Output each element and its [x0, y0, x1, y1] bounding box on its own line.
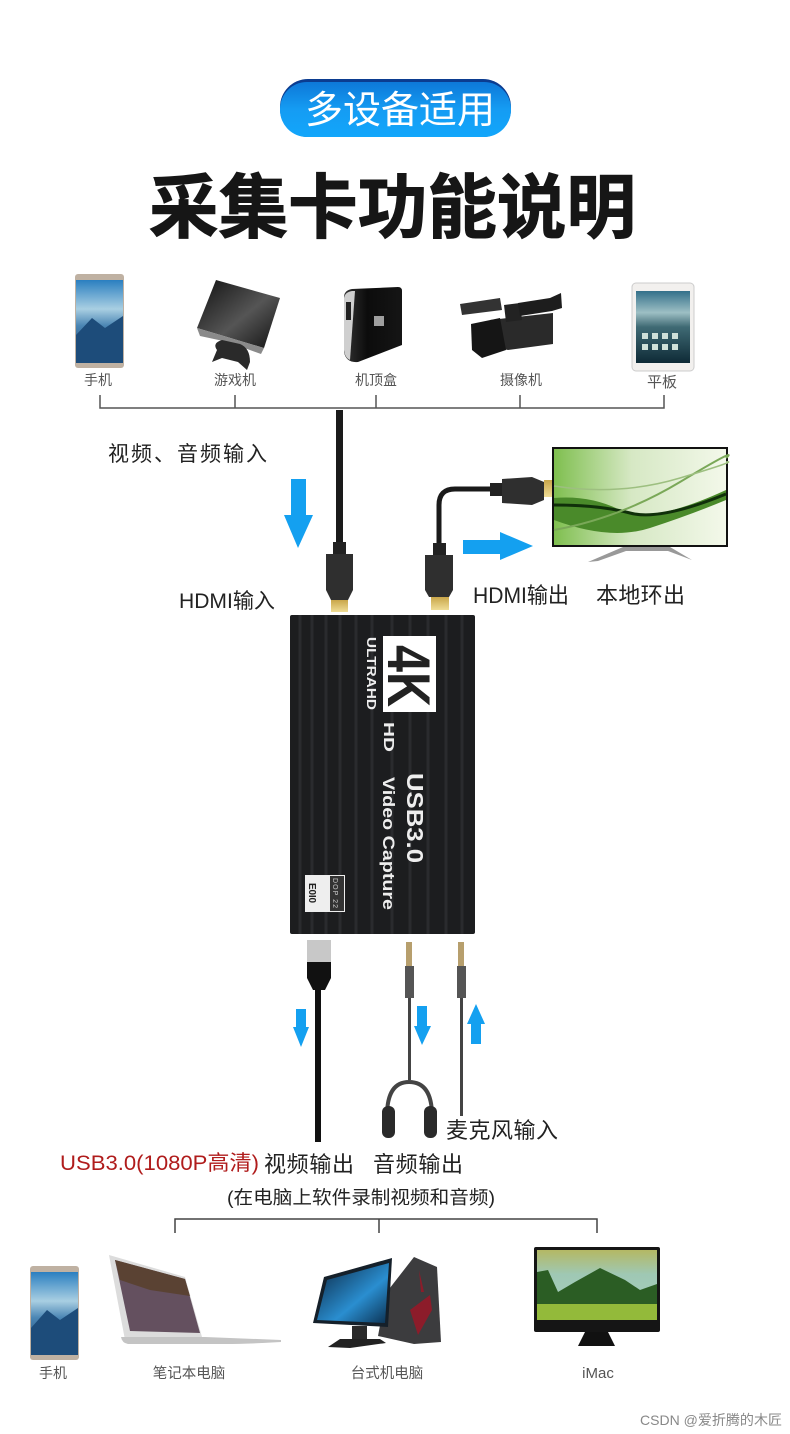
icon: phone: [75, 274, 124, 368]
label: 摄像机: 摄像机: [500, 372, 542, 388]
label: HDMI输入: HDMI输入: [179, 590, 275, 613]
title: 采集卡功能说明: [149, 169, 636, 247]
label: 游戏机: 游戏机: [214, 372, 256, 388]
label: 手机: 手机: [84, 372, 112, 388]
output devices row: [30, 1247, 660, 1382]
arrow: usb down: [293, 1009, 309, 1047]
text: USB3.0: USB3.0: [402, 773, 428, 863]
label: 音频输出: 音频输出: [373, 1152, 463, 1177]
label: 视频、音频输入: 视频、音频输入: [108, 443, 267, 466]
USB cable: [307, 940, 331, 1142]
label: USB3.0: USB3.0(1080P高清): [60, 1152, 259, 1175]
label: HDMI输出: HDMI输出: [473, 583, 569, 608]
label: 笔记本电脑: 笔记本电脑: [153, 1365, 225, 1382]
sticker: [305, 875, 345, 912]
badge: 多设备适用: 多设备适用: [305, 90, 495, 132]
input devices row: [75, 274, 694, 391]
label: iMac: iMac: [582, 1365, 614, 1382]
label: 平板: 平板: [647, 373, 677, 391]
top bracket connector: [100, 395, 664, 408]
arrow: input down: [284, 479, 313, 548]
icon: laptop: [109, 1255, 281, 1344]
label: 视频输出: 视频输出: [264, 1152, 354, 1177]
icon: tablet: [632, 283, 694, 371]
monitor: [552, 447, 729, 562]
watermark: CSDN @爱折腾的木匠: [640, 1412, 782, 1428]
icon: iMac: [534, 1247, 660, 1346]
icon: phone: [30, 1266, 79, 1360]
label: 麦克风输入: 麦克风输入: [446, 1118, 558, 1143]
badge: 多设备适用: [280, 79, 511, 137]
HDMI output cable: [425, 477, 552, 610]
arrow: mic up: [467, 1004, 485, 1044]
4K logo: 4K: [375, 645, 442, 707]
sticker: DOP 22: [331, 878, 338, 908]
audio jack output: [405, 942, 414, 1080]
label: 机顶盒: 机顶盒: [355, 372, 397, 388]
mic jack: [457, 942, 466, 1116]
label: 手机: 手机: [39, 1365, 67, 1381]
label: 台式机电脑: 台式机电脑: [351, 1365, 423, 1382]
icon: game console: [197, 280, 280, 370]
text: HD: HD: [380, 722, 397, 752]
icon: headphones: [382, 1082, 437, 1138]
icon: desktop PC: [313, 1257, 441, 1348]
arrow: output right: [463, 532, 533, 560]
sticker: E0I0: [306, 883, 317, 903]
label: 本地环出: 本地环出: [596, 583, 685, 608]
label: 软件录制: (在电脑上软件录制视频和音频): [227, 1187, 495, 1208]
text: ULTRA HD: ULTRAHD: [364, 637, 379, 710]
HDMI input cable: [326, 410, 353, 612]
arrow: audio down: [414, 1006, 431, 1045]
bottom bracket connector: [175, 1219, 597, 1233]
icon: video camera: [460, 293, 562, 358]
text: Video Capture: Video Capture: [379, 777, 398, 910]
capture card: [290, 615, 475, 934]
icon: set-top box: [344, 287, 402, 362]
